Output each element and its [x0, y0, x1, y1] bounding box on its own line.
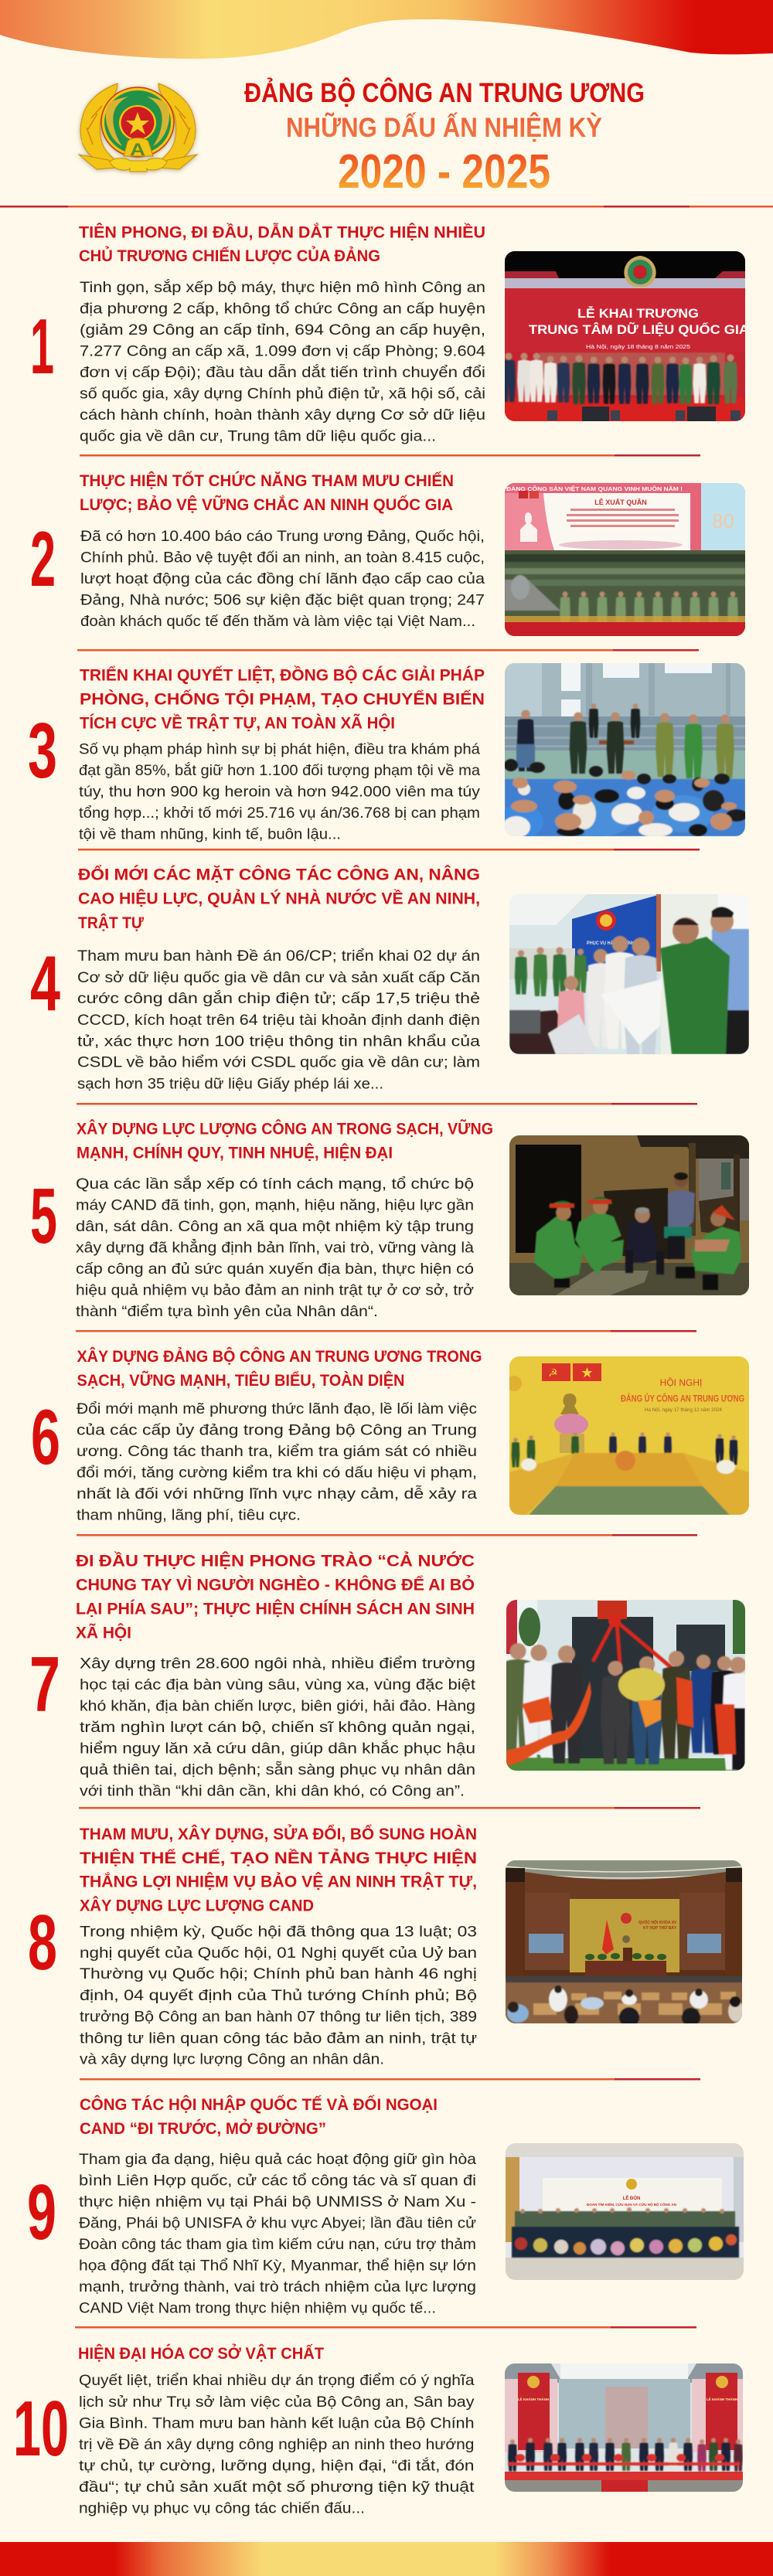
divider — [77, 649, 699, 651]
body text 1: 7.277 Công an cấp xã, 1.099 đơn vị cấp Phòng; 9.604 — [80, 342, 485, 359]
heading 5: MẠNH, CHÍNH QUY, TINH NHUỆ, HIỆN ĐẠI — [77, 1143, 393, 1162]
heading 7 — [76, 1550, 475, 1642]
photo: central party committee conference: Hà Nội, ngày 17 tháng 12 năm 2024 — [645, 1408, 723, 1413]
body text 9: thực hiện nhiệm vụ tại Phái bộ UNMISS ở Nam Xu - — [79, 2193, 476, 2210]
body text 6 — [77, 1400, 477, 1523]
body text 5 — [76, 1175, 474, 1320]
body text 5: xây dựng đã khẳng định bản lĩnh, vai trò, vững vàng là — [76, 1237, 474, 1256]
heading 7: ĐI ĐẦU THỰC HIỆN PHONG TRÀO “CẢ NƯỚC — [76, 1550, 475, 1570]
panel: section 4 — [30, 865, 749, 1092]
heading 2: THỰC HIỆN TỐT CHỨC NĂNG THAM MƯU CHIẾN — [80, 470, 454, 490]
number 9: 9 — [27, 2169, 56, 2256]
body text 5: hiệu quả nhiệm vụ bảo đảm an ninh trật tự ở cơ sở, trở — [76, 1281, 474, 1298]
body text 4 — [77, 948, 480, 1092]
body text 4: tử, xác thực hơn 100 triệu thông tin nhân khẩu của — [77, 1033, 480, 1050]
body text 10: Gia Bình. Tham mưu ban hành kết luận của Bộ Chính — [79, 2414, 475, 2431]
body text 9: họa động đất tại Thổ Nhĩ Kỳ, Myanmar, thể hiện sự lớn — [79, 2257, 476, 2274]
heading 1 — [79, 221, 485, 265]
body text 7: học tại các địa bàn vùng sâu, vùng xa, vùng đặc biệt — [80, 1676, 476, 1693]
body text 3: tổng hợp...; khởi tố mới 25.716 vụ án/36.768 bị can phạm — [79, 805, 480, 822]
heading 4: ĐỔI MỚI CÁC MẶT CÔNG TÁC CÔNG AN, NÂNG — [78, 865, 480, 884]
body text 3: đạt gần 85%, bắt giữ hơn 1.100 đối tượng phạm tội về ma — [79, 761, 480, 779]
footer band — [0, 2542, 773, 2576]
heading 3 — [80, 665, 485, 733]
photo: central party committee conference: ☭ — [548, 1366, 558, 1379]
panel: section 9 — [27, 2094, 744, 2316]
panel: section 5 — [30, 1119, 749, 1320]
body text 9: bình Liên Hợp quốc, cử các tổ công tác và sĩ quan đi — [79, 2172, 476, 2189]
body text 5: dân, sát dân. Công an xã qua một nhiệm kỳ tập trung — [76, 1218, 474, 1235]
divider — [80, 454, 700, 456]
heading 4: CAO HIỆU LỰC, QUẢN LÝ NHÀ NƯỚC VỀ AN NINH, — [78, 889, 480, 907]
number 2: 2 — [30, 516, 56, 603]
number 1: 1 — [30, 304, 54, 390]
photo: central party committee conference: HỘI NGHỊ — [660, 1376, 702, 1388]
heading 1: TIÊN PHONG, ĐI ĐẦU, DẪN DẮT THỰC HIỆN NHIỀU — [79, 221, 485, 241]
icon: police emblem — [79, 83, 197, 172]
title — [244, 77, 645, 199]
body text 1: số quốc gia, xây dựng Chính phủ điện tử, xã hội số, cải — [80, 385, 485, 402]
photo: central party committee conference: ĐẢNG ỦY CÔNG AN TRUNG ƯƠNG — [621, 1393, 744, 1404]
heading 8: THIỆN THỂ CHẾ, TẠO NỀN TẢNG THỰC HIỆN — [80, 1848, 477, 1867]
body text 10: nghiệp vụ phục vụ công tác chiến đấu... — [79, 2499, 365, 2516]
body text 8: trưởng Bộ Công an ban hành 07 thông tư liên tịch, 389 — [80, 2009, 477, 2026]
body text 9: mạnh, trưởng thành, vai trò trách nhiệm của lực lượng — [79, 2278, 476, 2295]
body text 6: đổi mới, tăng cường kiểm tra khi có dấu hiệu vi phạm, — [77, 1464, 477, 1481]
photo: anti-crime operation — [497, 663, 747, 839]
heading 7: CHUNG TAY VÌ NGƯỜI NGHÈO - KHÔNG ĐỂ AI BỎ — [76, 1575, 475, 1594]
divider — [75, 2326, 696, 2328]
photo: deployment ceremony: LỄ XUẤT QUÂN — [594, 498, 647, 506]
body text 8 — [80, 1923, 477, 2068]
number 3: 3 — [28, 708, 57, 795]
body text 9: Đăng, Phái bộ UNISFA ở khu vực Abyei; lần đầu tiên cử — [79, 2214, 476, 2231]
number 7: 7 — [29, 1642, 60, 1728]
heading 4 — [78, 865, 480, 932]
body text 1: Tinh gọn, sắp xếp bộ máy, thực hiện mô hình Công an — [80, 278, 485, 296]
number 8: 8 — [28, 1900, 57, 1986]
body text 7: quả thiên tai, dịch bệnh; sẵn sàng phục vụ nhân dân — [80, 1761, 475, 1778]
number 4: 4 — [30, 941, 60, 1027]
heading 6 — [77, 1346, 482, 1390]
body text 10 — [79, 2372, 475, 2516]
icon: police emblem: A — [130, 140, 145, 159]
heading 3: PHÒNG, CHỐNG TỘI PHẠM, TẠO CHUYỂN BIẾN — [80, 689, 485, 709]
body text 9: CAND Việt Nam trong thực hiện nhiệm vụ quốc tế... — [79, 2299, 436, 2316]
body text 8: nghị quyết của Quốc hội, 01 Nghị quyết của Uỷ ban — [80, 1945, 477, 1962]
body text 4: CSDL về bảo hiểm với CSDL quốc gia về dân cư; làm — [77, 1054, 480, 1071]
title line 2: NHỮNG DẤU ẤN NHIỆM KỲ — [286, 112, 602, 143]
photo: rescue team welcome: ĐOÀN TÌM KIẾM, CỨU NẠN VÀ CỨU HỘ BỘ CÔNG AN — [587, 2201, 676, 2207]
body text 5: thành “điểm tựa bình yên của Nhân dân“. — [76, 1303, 378, 1320]
panel: section 3 — [28, 663, 747, 842]
header divider — [0, 206, 773, 207]
body text 4: CCCD, kích hoạt trên 64 triệu tài khoản định danh điện — [77, 1012, 480, 1029]
divider — [79, 1807, 700, 1809]
body text 6: Đổi mới mạnh mẽ phương thức lãnh đạo, lề lối làm việc — [77, 1400, 477, 1417]
heading 6: SẠCH, VỮNG MẠNH, TIÊU BIỂU, TOÀN DIỆN — [77, 1370, 405, 1390]
photo: data centre opening: TRUNG TÂM DỮ LIỆU QUỐC GIA — [529, 322, 749, 337]
photo: data centre opening: Hà Nội, ngày 18 tháng 8 năm 2025 — [586, 343, 690, 350]
number 5: 5 — [30, 1173, 57, 1260]
divider — [77, 1534, 697, 1536]
body text 5: Qua các lần sắp xếp có tính cách mạng, tổ chức bộ — [76, 1175, 474, 1193]
divider — [77, 1103, 697, 1105]
divider — [78, 849, 700, 850]
body text 2: Đảng, Nhà nước; 506 sự kiện đặc biệt quan trọng; 247 — [80, 592, 485, 609]
body text 6: tham nhũng, lãng phí, tiêu cực. — [77, 1506, 301, 1523]
photo: national assembly hall: KỲ HỌP THỨ BẢY — [643, 1925, 677, 1931]
number 10: 10 — [13, 2386, 69, 2472]
heading 8: XÂY DỰNG LỰC LƯỢNG CAND — [80, 1895, 314, 1914]
title line 1: ĐẢNG BỘ CÔNG AN TRUNG ƯƠNG — [244, 77, 645, 108]
body text 8: thông tư liên quan công tác bảo đảm an ninh, trật tự — [80, 2030, 477, 2047]
panel: section 7 — [29, 1550, 754, 1799]
photo: national assembly hall: QUỐC HỘI KHÓA XV — [638, 1919, 677, 1925]
photo: central party committee conference: ★ — [581, 1366, 593, 1380]
body text 4: sạch hơn 35 triệu dữ liệu Giấy phép lái xe... — [77, 1075, 383, 1092]
heading 3: TÍCH CỰC VỀ TRẬT TỰ, AN TOÀN XÃ HỘI — [80, 713, 395, 733]
body text 4: cước công dân gắn chip điện tử; cấp 17,5 triệu thẻ — [77, 989, 480, 1007]
title years: 2020 - 2025 — [338, 145, 550, 199]
divider — [80, 2078, 700, 2081]
photo: officers inspecting public service desk — [509, 894, 749, 1054]
body text 9: Tham gia đa dạng, hiệu quả các hoạt động giữ gìn hòa — [79, 2151, 476, 2168]
body text 4: Tham mưu ban hành Đề án 06/CP; triển khai 02 dự án — [77, 948, 480, 965]
heading 2: LƯỢC; BẢO VỆ VỮNG CHẮC AN NINH QUỐC GIA — [80, 494, 453, 514]
body text 1: (giảm 29 Công an cấp tỉnh, 694 Công an cấp huyện, — [80, 322, 485, 339]
body text 9 — [79, 2151, 476, 2316]
body text 3: tội về tham nhũng, kinh tế, buôn lậu... — [79, 825, 341, 842]
body text 2: Chính phủ. Bảo vệ tuyệt đối an ninh, an toàn 8.415 cuộc, — [80, 549, 485, 566]
number 6: 6 — [31, 1394, 60, 1481]
heading 4: TRẬT TỰ — [78, 913, 144, 932]
photo: officers visiting villagers — [509, 1135, 749, 1295]
heading 1: CHỦ TRƯƠNG CHIẾN LƯỢC CỦA ĐẢNG — [79, 246, 380, 265]
body text 7: trăm nghìn lượt cán bộ, chiến sĩ không quản ngại, — [80, 1719, 475, 1736]
heading 8: THAM MƯU, XÂY DỰNG, SỬA ĐỔI, BỔ SUNG HOÀN — [80, 1824, 477, 1843]
body text 1: cách hành chính, hoàn thành xây dựng Cơ sở dữ liệu — [80, 407, 485, 424]
body text 3: Số vụ phạm pháp hình sự bị phát hiện, điều tra khám phá — [79, 740, 480, 757]
panel: section 10 — [13, 2343, 743, 2516]
body text 10: lịch sử như Trụ sở làm việc của Bộ Công an, Sân bay — [79, 2394, 475, 2411]
photo: deployment ceremony — [505, 483, 745, 636]
divider — [76, 1330, 696, 1332]
body text 10: tự chủ, tự cường, lưỡng dụng, hiện đại, “đi tắt, đón — [79, 2456, 475, 2475]
photo: headquarters inauguration: LỄ KHÁNH THÀNH — [707, 2397, 737, 2401]
photo: central party committee conference — [506, 1356, 749, 1515]
heading 8 — [80, 1824, 477, 1914]
body text 10: trị về Đề án xây dựng công nghiệp an ninh theo hướng — [79, 2436, 475, 2453]
photo: data centre opening — [502, 251, 749, 421]
panel: section 1 — [30, 221, 749, 444]
body text 7: Xây dựng trên 28.600 ngôi nhà, nhiều điểm trường — [80, 1656, 475, 1673]
body text 10: đầu“; tự chủ sản xuất một số phương tiện kỹ thuật — [79, 2479, 475, 2496]
body text 2 — [80, 528, 485, 630]
body text 1: địa phương 2 cấp, không tổ chức Công an cấp huyện — [80, 300, 485, 317]
body text 1: quốc gia về dân cư, Trung tâm dữ liệu quốc gia... — [80, 427, 436, 444]
heading 10: HIỆN ĐẠI HÓA CƠ SỞ VẬT CHẤT — [78, 2343, 324, 2363]
heading 8: THẮNG LỢI NHIỆM VỤ BẢO VỆ AN NINH TRẬT TỰ, — [80, 1872, 477, 1891]
photo: data centre opening: LỄ KHAI TRƯƠNG — [577, 306, 699, 321]
body text 2: lượt hoạt động của các đồng chí lãnh đạo cấp cao của — [80, 570, 485, 587]
photo: rescue team welcome: LỄ ĐÓN — [623, 2195, 640, 2201]
panel: section 2 — [30, 470, 745, 636]
top wave banner — [0, 0, 773, 59]
body text 2: đoàn khách quốc tế đến thăm và làm việc tại Việt Nam... — [80, 613, 475, 630]
photo: deployment ceremony: 80 — [712, 509, 734, 533]
body text 7: khó khăn, địa bàn chiến lược, biên giới, hải đảo. Hàng — [80, 1697, 475, 1714]
panel: section 6 — [31, 1346, 749, 1523]
body text 3 — [79, 740, 480, 842]
body text 9: Đoàn công tác tham gia tìm kiếm cứu nạn, cứu trợ thảm — [79, 2236, 476, 2253]
photo: rescue team welcome — [506, 2143, 744, 2280]
body text 2: Đã có hơn 10.400 báo cáo Trung ương Đảng, Quốc hội, — [80, 528, 485, 545]
body text 6: nhất là đối với những lĩnh vực nhạy cảm, dễ xảy ra — [77, 1485, 477, 1502]
photo: headquarters inauguration — [505, 2363, 743, 2492]
body text 8: định, 04 quyết định của Thủ tướng Chính phủ; Bộ — [80, 1987, 477, 2004]
body text 5: cấp công an đủ sức quán xuyến địa bàn, thực hiện có — [76, 1261, 474, 1278]
heading 6: XÂY DỰNG ĐẢNG BỘ CÔNG AN TRUNG ƯƠNG TRONG — [77, 1346, 482, 1366]
body text 4: Cơ sở dữ liệu quốc gia về dân cư và sản xuất cấp Căn — [77, 969, 480, 986]
body text 8: Trong nhiệm kỳ, Quốc hội đã thông qua 13 luật; 03 — [80, 1923, 477, 1940]
photo: national assembly hall — [506, 1860, 744, 2027]
body text 1: đơn vị cấp Đội); đầu tàu dẫn dắt tiến trình chuyển đổi — [80, 363, 485, 381]
heading 5 — [77, 1119, 493, 1162]
body text 6: ương. Công tác thanh tra, kiểm tra giám sát có nhiều — [77, 1443, 477, 1460]
photo: deployment ceremony: ĐẢNG CỘNG SẢN VIỆT NAM QUANG VINH MUÔN NĂM ! — [506, 485, 683, 492]
heading 2 — [80, 470, 454, 514]
body text 6: của các cấp ủy đảng trong Đảng bộ Công an Trung — [77, 1421, 477, 1438]
body text 3: túy, thu hơn 900 kg heroin và hơn 942.000 viên ma túy — [79, 783, 480, 800]
heading 9: CÔNG TÁC HỘI NHẬP QUỐC TẾ VÀ ĐỐI NGOẠI — [80, 2094, 438, 2114]
heading 7: LẠI PHÍA SAU”; THỰC HIỆN CHÍNH SÁCH AN SINH — [76, 1598, 475, 1618]
body text 8: Thường vụ Quốc hội; Chính phủ ban hành 46 nghị — [80, 1965, 477, 1982]
panel: section 8 — [28, 1824, 744, 2068]
heading 9 — [80, 2094, 438, 2138]
body text 7: hiểm nguy lăn xả cứu dân, giúp dân khắc phục hậu — [80, 1739, 475, 1757]
photo: officers inspecting public service desk: PHỤC VỤ HÀNH CHÍNH CÔNG — [587, 940, 649, 946]
heading 9: CAND “ĐI TRƯỚC, MỞ ĐƯỜNG” — [80, 2118, 326, 2138]
heading 3: TRIỂN KHAI QUYẾT LIỆT, ĐỒNG BỘ CÁC GIẢI PHÁP — [80, 665, 485, 685]
body text 8: và xây dựng lực lượng Công an nhân dân. — [80, 2051, 384, 2068]
photo: headquarters inauguration: LỄ KHÁNH THÀNH — [518, 2397, 549, 2401]
heading 5: XÂY DỰNG LỰC LƯỢNG CÔNG AN TRONG SẠCH, VỮNG — [77, 1119, 493, 1138]
heading 7: XÃ HỘI — [76, 1622, 131, 1642]
body text 10: Quyết liệt, triển khai nhiều dự án trọng điểm có ý nghĩa — [79, 2372, 475, 2389]
photo: house handover ribbon cutting — [502, 1600, 754, 1771]
body text 1 — [80, 278, 485, 444]
body text 7 — [80, 1656, 476, 1799]
body text 7: với tinh thần “khi dân cần, khi dân khó, có Công an”. — [80, 1782, 465, 1799]
body text 5: máy CAND đã tinh, gọn, mạnh, hiệu năng, hiệu lực gần — [76, 1196, 474, 1213]
